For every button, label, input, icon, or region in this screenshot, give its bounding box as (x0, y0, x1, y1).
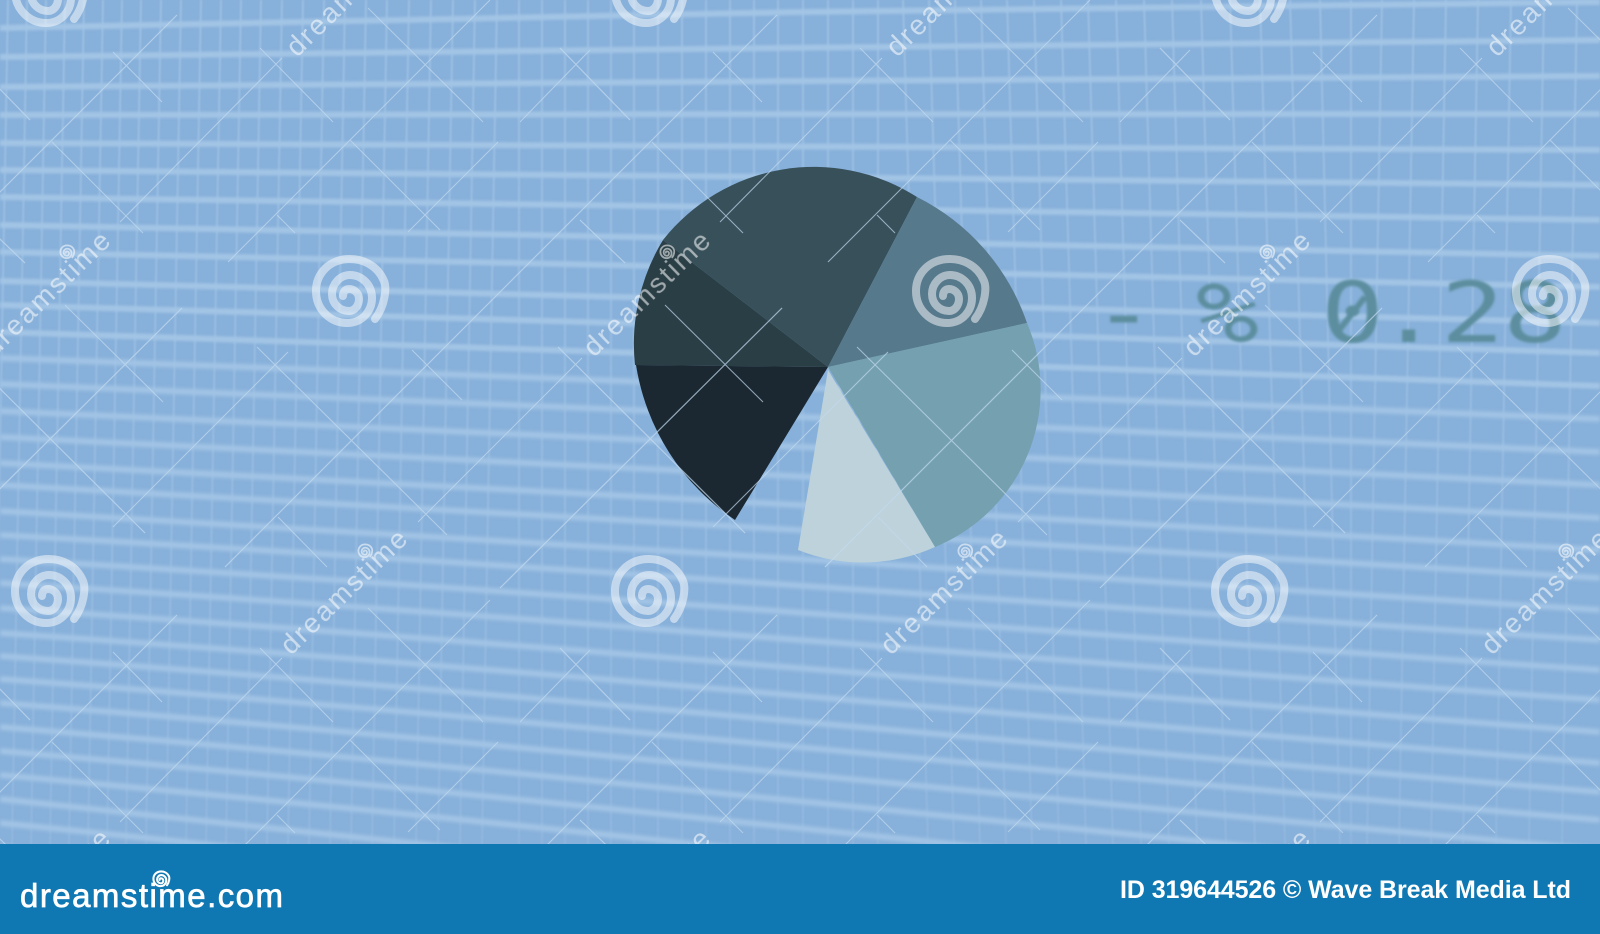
watermark spirals (15, 0, 1585, 623)
slice: steel blue (828, 197, 1027, 367)
watermark text: dreamstime (577, 225, 716, 362)
watermark mini spirals (60, 245, 1573, 557)
slice: pale (798, 370, 935, 563)
image credit: ID 319644526 © Wave Break Media Ltd (1120, 876, 1571, 904)
pie chart (634, 167, 1041, 563)
watermark text: dreamstime (874, 523, 1013, 660)
watermark text: dreamstime (1177, 225, 1316, 362)
slice: teal (828, 323, 1041, 547)
footer logo wordmark: dreamstime.com (20, 877, 283, 914)
watermark text: me (667, 823, 716, 872)
watermark text: dreamstime (274, 523, 413, 660)
slice: near black (636, 365, 828, 520)
watermark text: me (67, 823, 116, 872)
slice: charcoal (634, 240, 828, 367)
footer bar (0, 844, 1600, 934)
watermark text: me (1267, 823, 1316, 872)
slice: top dark slate (663, 167, 917, 367)
icon: footer logo spiral (153, 871, 169, 886)
percentage readout: -%0.28 (1092, 265, 1567, 362)
